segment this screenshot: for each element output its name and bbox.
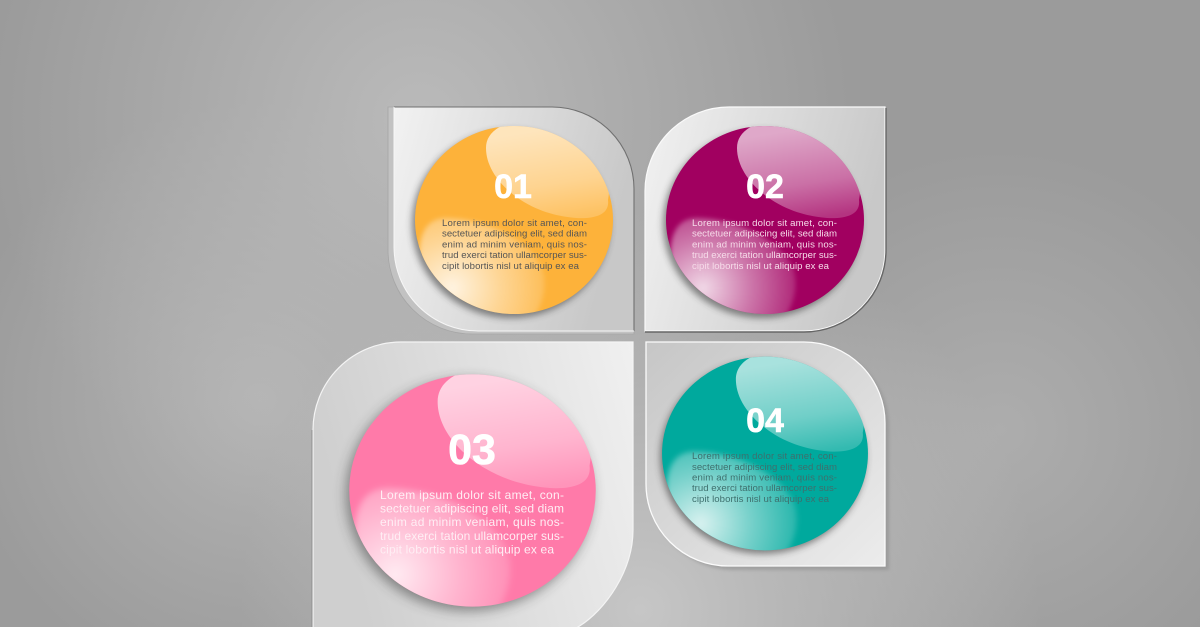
text block 02: sectetuer adipiscing elit, sed diam (692, 228, 837, 240)
text block 04: enim ad minim veniam, quis nos- (692, 472, 837, 484)
text block 03: enim ad minim veniam, quis nos- (380, 515, 564, 529)
circle 03 (346, 367, 597, 620)
text block 02: enim ad minim veniam, quis nos- (692, 240, 837, 250)
text block 03: trud exerci tation ullamcorper sus- (380, 529, 564, 543)
text block 02 (692, 218, 837, 272)
circle 01 (412, 120, 614, 325)
text block 02: cipit lobortis nisl ut aliquip ex ea (692, 261, 830, 272)
text block 02: trud exerci tation ullamcorper sus- (692, 250, 837, 261)
panel: 01 (388, 107, 634, 334)
text block 01: trud exerci tation ullamcorper sus- (442, 250, 587, 261)
text block 04 (692, 451, 837, 505)
number 04: 04 (746, 402, 784, 440)
text block 04: sectetuer adipiscing elit, sed diam (692, 462, 837, 473)
panel: 02 (645, 107, 886, 332)
text block 02: Lorem ipsum dolor sit amet, con- (692, 218, 837, 229)
text block 03 (380, 488, 564, 556)
number 02: 02 (746, 168, 784, 206)
text block 04: Lorem ipsum dolor sit amet, con- (692, 451, 837, 462)
text block 01: Lorem ipsum dolor sit amet, con- (442, 218, 587, 229)
circle 04 (660, 350, 869, 562)
number 03: 03 (448, 426, 496, 474)
text block 01: cipit lobortis nisl ut aliquip ex ea (442, 261, 580, 272)
text block 03: sectetuer adipiscing elit, sed diam (380, 502, 564, 516)
panel: 04 (646, 342, 889, 570)
text block 03: Lorem ipsum dolor sit amet, con- (380, 488, 564, 502)
text block 01 (442, 218, 587, 272)
text block 03: cipit lobortis nisl ut aliquip ex ea (380, 542, 554, 556)
text block 01: sectetuer adipiscing elit, sed diam (442, 228, 587, 240)
panel: 03 (312, 342, 633, 627)
text block 04: cipit lobortis nisl ut aliquip ex ea (692, 494, 830, 505)
text block 01: enim ad minim veniam, quis nos- (442, 240, 587, 250)
text block 04: trud exerci tation ullamcorper sus- (692, 483, 837, 494)
circle 02 (663, 120, 865, 325)
number 01: 01 (494, 168, 532, 206)
